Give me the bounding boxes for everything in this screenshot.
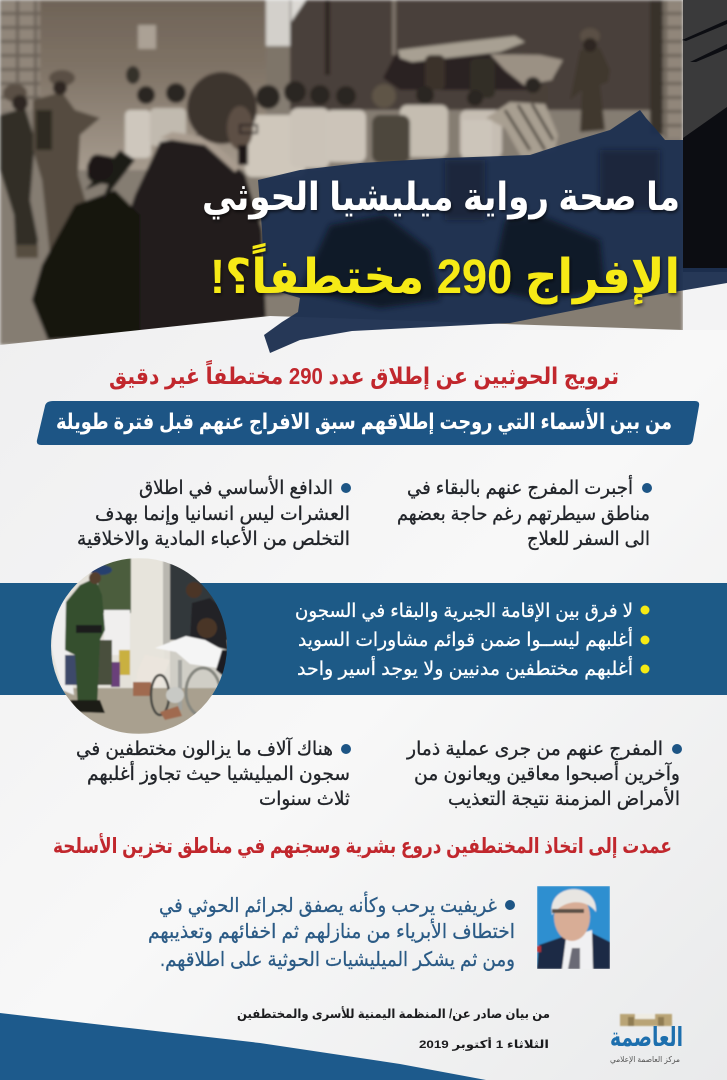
logo: العاصمة — [610, 1022, 683, 1052]
Griffiths statement: ومن ثم يشكر الميليشيات الحوثية على اطلاقهم. — [160, 949, 515, 971]
blue band with key points: لا فرق بين الإقامة الجبرية والبقاء في السجون — [295, 601, 633, 622]
dark right strip — [682, 0, 727, 272]
header photo: crowd and soldiers — [0, 0, 683, 345]
text block: forced to stay — [397, 475, 652, 550]
portrait: Griffiths — [537, 886, 610, 969]
red subheading: ترويج الحوثيين عن إطلاق عدد 290 مختطفاً غير دقيق — [109, 360, 619, 390]
circular photo: released man in wheelchair — [50, 558, 230, 734]
source line: من بيان صادر عن/ المنظمة اليمنية للأسرى والمختطفين — [237, 1006, 550, 1021]
text block: thousands still detained — [76, 736, 351, 810]
title — [202, 176, 680, 305]
blue band with key points: أغلبهم ليســوا ضمن قوائم مشاورات السويد — [298, 627, 633, 651]
soldiers — [0, 48, 610, 258]
text block: forced to stay: الى السفر للعلاج — [527, 529, 650, 550]
logo: مركز العاصمة الإعلامي — [610, 1055, 680, 1065]
bottom blue swoosh — [0, 1013, 486, 1080]
page background — [0, 330, 727, 1080]
truck — [383, 54, 527, 91]
Griffiths statement: اختطاف الأبرياء من منازلهم ثم اخفائهم وتعذيبهم — [148, 919, 515, 943]
blue band with key points: أغلبهم مختطفين مدنيين ولا يوجد أسير واحد — [297, 656, 633, 680]
text block: released after surgery: وآخرين أصبحوا معاقين ويعانون من — [414, 761, 680, 785]
source line — [237, 1006, 550, 1051]
text block: main motive: التخلص من الأعباء المادية والاخلاقية — [77, 527, 350, 550]
man in wheelchair — [197, 618, 217, 638]
text block: released after surgery: الأمراض المزمنة نتيجة التعذيب — [448, 787, 680, 810]
attendant — [190, 598, 228, 650]
blue banner — [37, 401, 699, 445]
soldier — [65, 578, 105, 712]
text block: released after surgery — [406, 739, 682, 810]
text block: main motive — [77, 476, 351, 550]
foreground man — [128, 133, 268, 330]
text block: thousands still detained: ثلاث سنوات — [259, 789, 350, 810]
crowd — [245, 115, 305, 177]
text block: thousands still detained: هناك آلاف ما يزالون مختطفين في — [76, 736, 333, 760]
text block: thousands still detained: سجون الميليشيا حيث تجاوز أغلبهم — [87, 761, 350, 785]
title: الإفراج 290 مختطفاً؟! — [210, 242, 680, 305]
blue band with key points — [0, 583, 727, 695]
text block: main motive: الدافع الأساسي في اطلاق — [139, 476, 333, 499]
scarf — [486, 102, 558, 158]
source line: الثلاثاء 1 أكتوبر 2019 — [419, 1037, 549, 1051]
text block: released after surgery: المفرج عنهم من جرى عملية ذمار — [406, 739, 663, 760]
text block: forced to stay: أجبرت المفرج عنهم بالبقاء في — [407, 475, 633, 499]
Griffiths statement: غريفيت يرحب وكأنه يصفق لجرائم الحوثي في — [159, 891, 497, 918]
text block: forced to stay: مناطق سيطرتهم رغم حاجة بعضهم — [397, 504, 650, 525]
text block: main motive: العشرات ليس انسانيا وإنما بهدف — [95, 504, 350, 526]
logo — [610, 1014, 683, 1065]
Griffiths statement — [148, 891, 515, 971]
navy brush stroke behind title — [258, 110, 727, 353]
